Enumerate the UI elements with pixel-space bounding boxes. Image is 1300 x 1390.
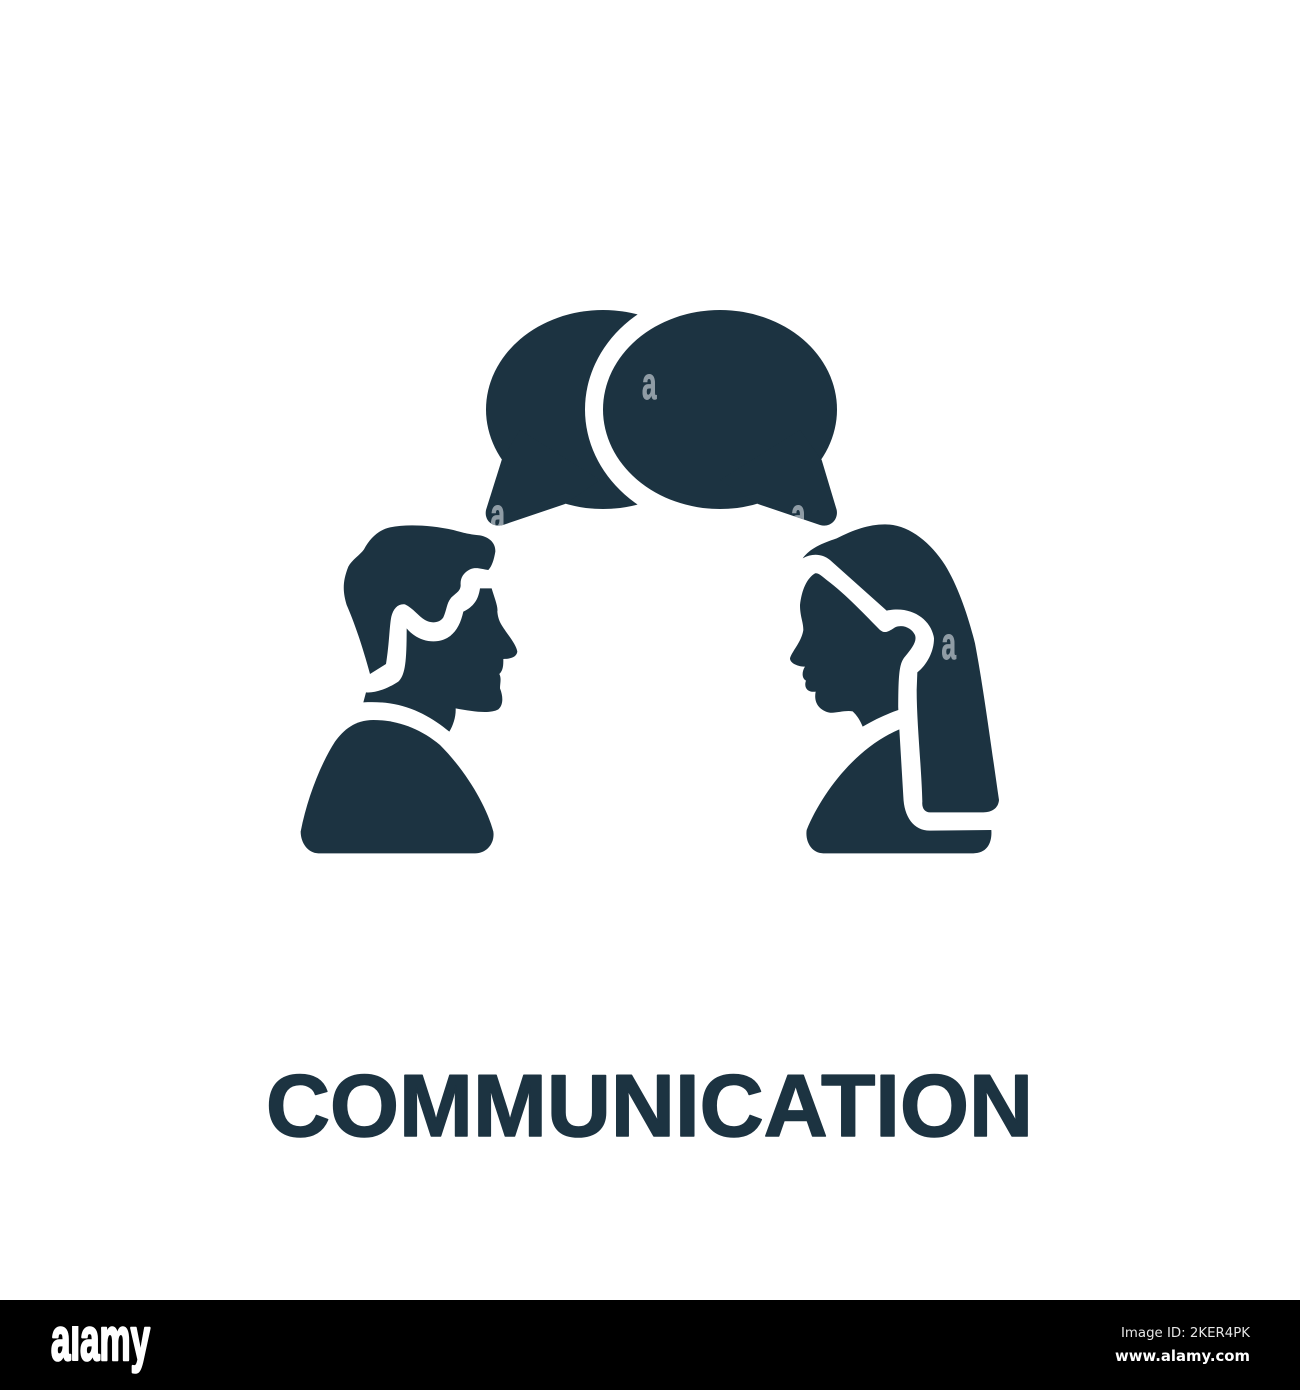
footer website: www.alamy.com	[1115, 1347, 1250, 1365]
icon: man in profile	[301, 525, 517, 853]
footer bar	[0, 1300, 1300, 1390]
icon: speech bubbles	[486, 290, 855, 530]
watermark marks on icon: a	[942, 618, 957, 669]
title: COMMUNICATION	[266, 1056, 1033, 1155]
right speech bubble	[603, 310, 837, 526]
white gap between bubbles	[585, 290, 855, 530]
woman hair	[803, 524, 999, 812]
left speech bubble	[486, 310, 720, 526]
footer logo: alamy	[51, 1306, 150, 1373]
man shoulders	[301, 720, 494, 853]
watermark marks on icon: a	[791, 489, 806, 540]
man hair	[344, 525, 495, 674]
watermark marks on icon: a	[642, 358, 657, 409]
man face	[363, 588, 517, 732]
woman shoulders	[806, 729, 991, 853]
footer image id: Image ID: 2KER4PK	[1121, 1325, 1251, 1341]
watermark marks on icon: a	[490, 489, 506, 540]
infographic canvas	[0, 310, 1300, 1390]
icon: woman in profile	[790, 524, 999, 853]
woman face	[790, 573, 916, 727]
watermark marks on icon	[490, 358, 957, 669]
